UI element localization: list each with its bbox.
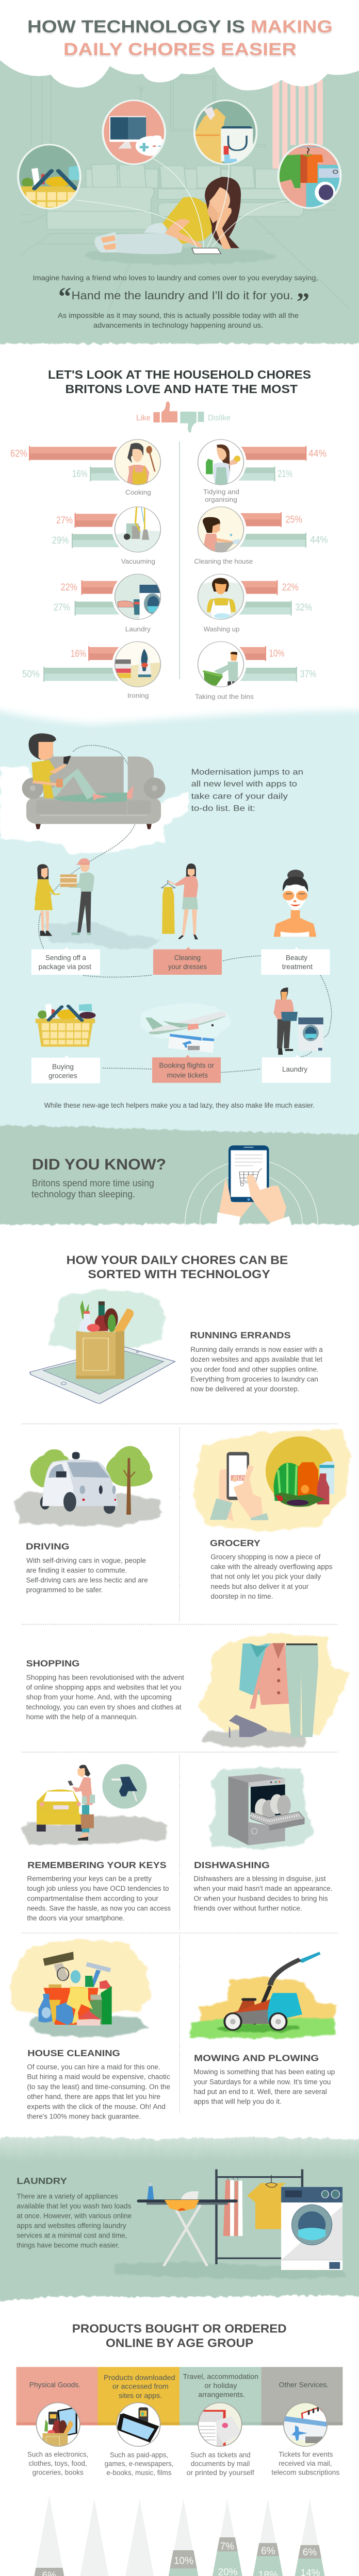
text: (to say the least) and time-consuming. On the: [27, 2083, 170, 2091]
text: category examples: telecom subscriptions: [271, 2468, 339, 2476]
legend: like and dislike: Dislike: [208, 414, 231, 422]
text: there's 100% money back guarantee.: [27, 2112, 141, 2120]
text: Running daily errands is now easier with a: [190, 1346, 323, 1353]
callout: booking flights: Booking flights or: [159, 1061, 214, 1069]
icon: grocery basket circle: [17, 144, 81, 210]
row: laundry and washing up: Laundry: [125, 625, 151, 633]
illustration: clothes: [197, 1633, 350, 1747]
panel: hero: [0, 0, 359, 344]
icon: vacuuming: [112, 506, 161, 552]
text: category examples: Such as electronics,: [27, 2450, 88, 2458]
icon: cleaning the house: [197, 506, 247, 552]
text: category examples: Such as paid-apps,: [110, 2450, 168, 2459]
row: ironing and bins: 37%: [300, 669, 316, 680]
row: cooking and tidying: 62%: [10, 449, 27, 460]
heading: DRIVING: [26, 1541, 69, 1552]
icon: physical goods circle: [37, 2403, 80, 2447]
category: downloaded products: or accessed from: [112, 2382, 169, 2391]
heading: LAUNDRY: [17, 2176, 67, 2186]
heading: products by age group: PRODUCTS BOUGHT OR ORDERED: [72, 2322, 287, 2335]
text: Dishwashers are a blessing in disguise, just: [194, 1875, 326, 1883]
chart: purchases by age group: [34, 2496, 325, 2576]
text: available that let you wash two loads: [17, 2202, 132, 2210]
text: things have become much easier.: [17, 2242, 120, 2249]
illustration: sending a package: [35, 858, 94, 936]
illustration: bag on tablet: [30, 1289, 175, 1403]
values: 35-44: [207, 2541, 238, 2576]
panel: product categories: [17, 2367, 342, 2477]
text: are finding it easier to commute.: [26, 1566, 127, 1574]
text: apps that will help you do it.: [194, 2098, 282, 2106]
panel: modernisation background: [0, 706, 359, 1149]
illustration: cleaning dresses: [161, 863, 198, 939]
row: ironing and bins: Taking out the bins: [195, 693, 254, 701]
row: ironing and bins: 10%: [269, 648, 285, 659]
text: [193, 1875, 332, 1912]
callout: booking flights: movie tickets: [167, 1071, 208, 1079]
text: [17, 2192, 132, 2249]
category: other services: Other Services.: [279, 2380, 329, 2388]
illustration: beauty treatment: [273, 870, 316, 937]
row: ironing and bins: 16%: [71, 649, 86, 659]
values: 45-54: 10%: [174, 2556, 193, 2567]
heading: products by age group: [72, 2322, 287, 2350]
row: laundry and washing up: 27%: [54, 602, 70, 613]
row: cooking and tidying: organising: [205, 496, 237, 503]
text: Mowing is something that has been eating up: [194, 2068, 335, 2076]
illustration: lawn mower: [189, 1952, 337, 2039]
legend: like and dislike: Like: [136, 414, 151, 422]
row: cooking and tidying: Tidying and: [203, 488, 239, 496]
illustration: woman with tablet: [75, 159, 286, 254]
icon: travel circle: [198, 2403, 242, 2447]
text: category examples: Such as tickets and: [190, 2450, 251, 2459]
heading: MOWING AND PLOWING: [194, 2053, 319, 2063]
category: downloaded products: [98, 2367, 180, 2426]
chart: likes and dislikes bars: [10, 446, 328, 701]
category: travel: [180, 2367, 261, 2426]
callout: laundry: Laundry: [282, 1065, 307, 1073]
heading: sorted with technology: HOW YOUR DAILY CHORES CAN BE: [67, 1253, 288, 1266]
text: friends over without further notice.: [194, 1904, 302, 1912]
text: intro: advancements in technology happening around us.: [93, 321, 263, 329]
row: vacuuming and cleaning: [52, 512, 328, 565]
illustration: shadow blob: [43, 922, 160, 950]
title: DAILY CHORES EASIER: [63, 40, 297, 59]
icon: dress and shopping bag circle: [193, 99, 257, 165]
row: cooking and tidying: 16%: [72, 469, 88, 480]
values: 16-24: 6%: [303, 2547, 317, 2558]
panel: dishwashing: [193, 1767, 332, 1912]
dotted path: [39, 745, 332, 1073]
icon: other services circle: [284, 2403, 327, 2446]
category: travel: or holiday: [204, 2381, 237, 2389]
text: [190, 1346, 323, 1393]
text: your Saturdays for a while now. It's time you: [194, 2078, 331, 2086]
text: apps and websites offering laundry: [17, 2222, 126, 2230]
illustration: phone with cart: [185, 1145, 318, 1230]
illustration: phone and groceries: BUY: [233, 1476, 247, 1481]
text: compartmentalise them according to your: [27, 1894, 159, 1902]
text: intro: Imagine having a friend who loves to laundry and comes over to you everyday saying,: [33, 274, 318, 282]
illustration: phone and groceries: [192, 1429, 350, 1532]
callout: laundry: [262, 1055, 331, 1083]
values: 25-34: 6%: [261, 2546, 275, 2556]
icon: laundry: [112, 574, 161, 620]
row: cooking and tidying: [10, 446, 327, 503]
text: home with the help of a mannequin.: [26, 1713, 138, 1721]
text: had put an end to it. Well, there are several: [194, 2088, 327, 2095]
text: Everything from groceries to laundry can: [190, 1375, 318, 1383]
callout: booking flights: [152, 1055, 221, 1083]
row: laundry and washing up: 22%: [282, 582, 299, 593]
panel: did you know background: [0, 1125, 359, 1225]
heading: DID YOU KNOW?: [32, 1156, 166, 1173]
row: laundry and washing up: [54, 580, 312, 633]
text: category examples: groceries, books: [32, 2468, 84, 2476]
callout: cleaning your dresses: [153, 947, 222, 975]
callout: beauty treatment: treatment: [282, 962, 313, 971]
illustration: car, woman and key: [21, 1764, 167, 1844]
row: vacuuming and cleaning: 27%: [56, 515, 73, 526]
heading: RUNNING ERRANDS: [190, 1330, 291, 1341]
icon: tidying: [197, 439, 247, 485]
text: category examples: [27, 2450, 339, 2477]
values: 16-24: [300, 2547, 321, 2576]
row: cooking and tidying: 21%: [278, 469, 292, 480]
icon: washing up: [197, 574, 247, 620]
text: [26, 1556, 148, 1594]
panel: did you know: [31, 1145, 318, 1230]
values: 25-34: [248, 2546, 278, 2576]
text: needs. Save the hassle, as now you can access: [27, 1904, 171, 1912]
text: [194, 2068, 335, 2106]
heading: household chores: [48, 368, 311, 396]
quote: ”: [297, 287, 309, 316]
category: travel: Travel, accommodation: [183, 2372, 258, 2381]
heading: HOUSE CLEANING: [27, 2048, 120, 2058]
text: doorstep in no time.: [210, 1592, 273, 1600]
category: physical goods: [17, 2367, 98, 2426]
text: Self-driving cars are less hectic and are: [26, 1577, 148, 1584]
row: laundry and washing up: 32%: [296, 602, 312, 613]
text: Or when your husband decides to bring his: [194, 1894, 328, 1902]
text: now be delivered at your doorstep.: [190, 1385, 300, 1393]
illustration: cleaning supplies: [9, 1939, 151, 2037]
text: you order food and other supplies online.: [190, 1365, 319, 1373]
text: tech helpers: While these new-age tech helpers make you a tad lazy, they also make life much easier.: [44, 1101, 315, 1109]
text: when your maid hasn't made an appearance.: [193, 1885, 332, 1892]
row: laundry and washing up: 22%: [61, 582, 77, 593]
text: category examples: e-books, music, films: [106, 2468, 171, 2477]
text: modernisation: to-do list. Be it:: [191, 804, 255, 813]
text: category examples: received via mail,: [279, 2459, 332, 2467]
panel: shopping: [26, 1633, 350, 1747]
panel: remembering your keys: [21, 1764, 171, 1922]
text: tough job unless you have OCD tendencies to: [27, 1885, 169, 1892]
category: downloaded products: sites or apps.: [119, 2391, 162, 2399]
text: intro: [33, 274, 318, 329]
callouts: first row: [31, 947, 330, 975]
text: category examples: or printed by yourself: [187, 2468, 254, 2477]
text: category examples: documents by mail: [191, 2460, 250, 2468]
icon: computer and gamepad circle: [102, 99, 167, 165]
category: travel: arrangements.: [198, 2391, 245, 2399]
illustration: woman on sofa: [22, 733, 165, 829]
text: technology, you can even try shoes and clothes at: [26, 1703, 182, 1711]
text: There are a variety of appliances: [17, 2192, 118, 2200]
row: vacuuming and cleaning: 29%: [52, 535, 69, 546]
text: [210, 1553, 333, 1600]
callout: sending off a package: Sending off a: [45, 953, 86, 961]
text: category examples: Tickets for events: [279, 2450, 333, 2458]
text: programmed to be safer.: [26, 1586, 103, 1594]
text: experts with the click of the mouse. Oh! And: [27, 2103, 166, 2110]
cloud behind sofa: [0, 767, 190, 854]
text: modernisation: take care of your daily: [191, 792, 288, 801]
category: physical goods: Physical Goods.: [29, 2380, 80, 2388]
text: modernisation: Modernisation jumps to an: [191, 768, 303, 776]
panel: laundry: [0, 2137, 359, 2303]
text: [31, 1178, 154, 1199]
callout: beauty treatment: Beauty: [286, 953, 307, 961]
heading: sorted with technology: SORTED WITH TECHNOLOGY: [88, 1267, 270, 1281]
text: of online shopping apps and websites that let you: [26, 1684, 181, 1691]
cloud: [0, 0, 359, 90]
text: Grocery shopping is now a piece of: [210, 1553, 321, 1561]
heading: REMEMBERING YOUR KEYS: [27, 1860, 167, 1870]
text: dozen websites and apps available that let: [190, 1355, 322, 1363]
callout: buying groceries: Buying: [52, 1062, 74, 1071]
quote: “: [58, 282, 71, 311]
text: needs but also deliver it at your: [210, 1583, 309, 1590]
title: [27, 17, 333, 59]
row: cooking and tidying: Cooking: [125, 488, 151, 496]
text: shop from your home. And, with the upcoming: [26, 1693, 172, 1701]
heading: DISHWASHING: [194, 1860, 270, 1870]
illustration: self-driving car: [14, 1446, 160, 1527]
category: other services: [261, 2367, 342, 2426]
category: downloaded products: Products downloaded: [104, 2373, 175, 2381]
callout: cleaning your dresses: your dresses: [168, 962, 207, 971]
row: vacuuming and cleaning: 44%: [310, 535, 328, 546]
text: that not only let you pick your daily: [210, 1573, 321, 1581]
row: cooking and tidying: 44%: [308, 449, 327, 460]
text: technology than sleeping.: [31, 1189, 135, 1199]
text: the doors via your smartphone.: [27, 1914, 125, 1922]
row: vacuuming and cleaning: Cleaning the house: [194, 557, 253, 565]
text: [27, 1875, 171, 1922]
text: [26, 1674, 184, 1721]
row: laundry and washing up: Washing up: [204, 625, 240, 633]
text: cake with the already overflowing apps: [210, 1563, 333, 1571]
row: vacuuming and cleaning: 25%: [286, 514, 302, 525]
text: category examples: games, e-newspapers,: [105, 2460, 173, 2468]
divider: [179, 442, 180, 679]
row: ironing and bins: Ironing: [127, 691, 149, 699]
heading: household chores: LET'S LOOK AT THE HOUSEHOLD CHORES: [48, 368, 311, 381]
callout: beauty treatment: [261, 947, 330, 975]
text: modernisation: [191, 768, 303, 813]
panel: mowing and plowing: [189, 1952, 337, 2106]
heading: household chores: BRITONS LOVE AND HATE THE MOST: [65, 382, 298, 396]
icon: clothes and washer circle: [278, 143, 344, 209]
text: [27, 2063, 170, 2120]
panel: running errands: [30, 1289, 323, 1403]
illustration: ironing and washing machine: [115, 2170, 344, 2279]
icon: cooking: [112, 439, 161, 485]
text: But hiring a maid would be expensive, chaotic: [27, 2073, 170, 2081]
panel: driving: [14, 1446, 160, 1594]
heading: products by age group: ONLINE BY AGE GROUP: [106, 2336, 253, 2350]
icon: taking out the bins: [197, 641, 247, 687]
text: services at a minimal cost and time,: [17, 2232, 127, 2239]
text: at once. However, with various online: [17, 2212, 132, 2220]
row: vacuuming and cleaning: Vacuuming: [121, 557, 155, 565]
callout: sending off a package: package via post: [39, 962, 91, 971]
illustration: living room: [21, 76, 349, 313]
text: Of course, you can hire a maid for this one.: [27, 2063, 160, 2071]
quote: [58, 282, 309, 316]
text: With self-driving cars in vogue, people: [26, 1556, 146, 1564]
callouts: second row: [31, 1055, 331, 1083]
text: Britons spend more time using: [32, 1178, 154, 1188]
text: Remembering your keys can be a pretty: [27, 1875, 152, 1883]
text: intro: As impossible as it may sound, this is actually possible today with all the: [58, 311, 299, 319]
heading: SHOPPING: [26, 1658, 79, 1668]
illustration: man with washing machine: [273, 988, 323, 1055]
callout: buying groceries: [31, 1055, 100, 1083]
text: other hand, there are apps that let you hire: [27, 2093, 160, 2100]
heading: sorted with technology: [67, 1253, 288, 1281]
illustration: grocery basket: [36, 1004, 96, 1047]
callout: cleaning your dresses: Cleaning: [174, 953, 201, 961]
text: category examples: clothes, toys, food,: [29, 2459, 87, 2467]
panel: house cleaning: [9, 1939, 170, 2120]
title: MAKING: [251, 17, 333, 37]
title: HOW TECHNOLOGY IS: [27, 17, 245, 37]
icon: downloads circle: [117, 2403, 160, 2446]
row: ironing and bins: [22, 646, 316, 701]
icon: ironing: [112, 641, 161, 687]
legend: like and dislike: [136, 401, 231, 433]
panel: grocery: [192, 1429, 350, 1600]
row: ironing and bins: 50%: [22, 669, 40, 680]
text: modernisation: all new level with apps to: [191, 780, 297, 789]
values: 35-44: 7%: [220, 2541, 234, 2552]
quote: Hand me the laundry and I'll do it for you.: [71, 289, 293, 302]
heading: GROCERY: [210, 1538, 260, 1548]
text: Shopping has been revolutionised with the advent: [26, 1674, 184, 1682]
illustration: plane and ticket: [140, 1003, 231, 1053]
illustration: dishwasher: [209, 1767, 314, 1850]
callout: buying groceries: groceries: [48, 1071, 77, 1079]
callout: sending off a package: [31, 947, 100, 975]
